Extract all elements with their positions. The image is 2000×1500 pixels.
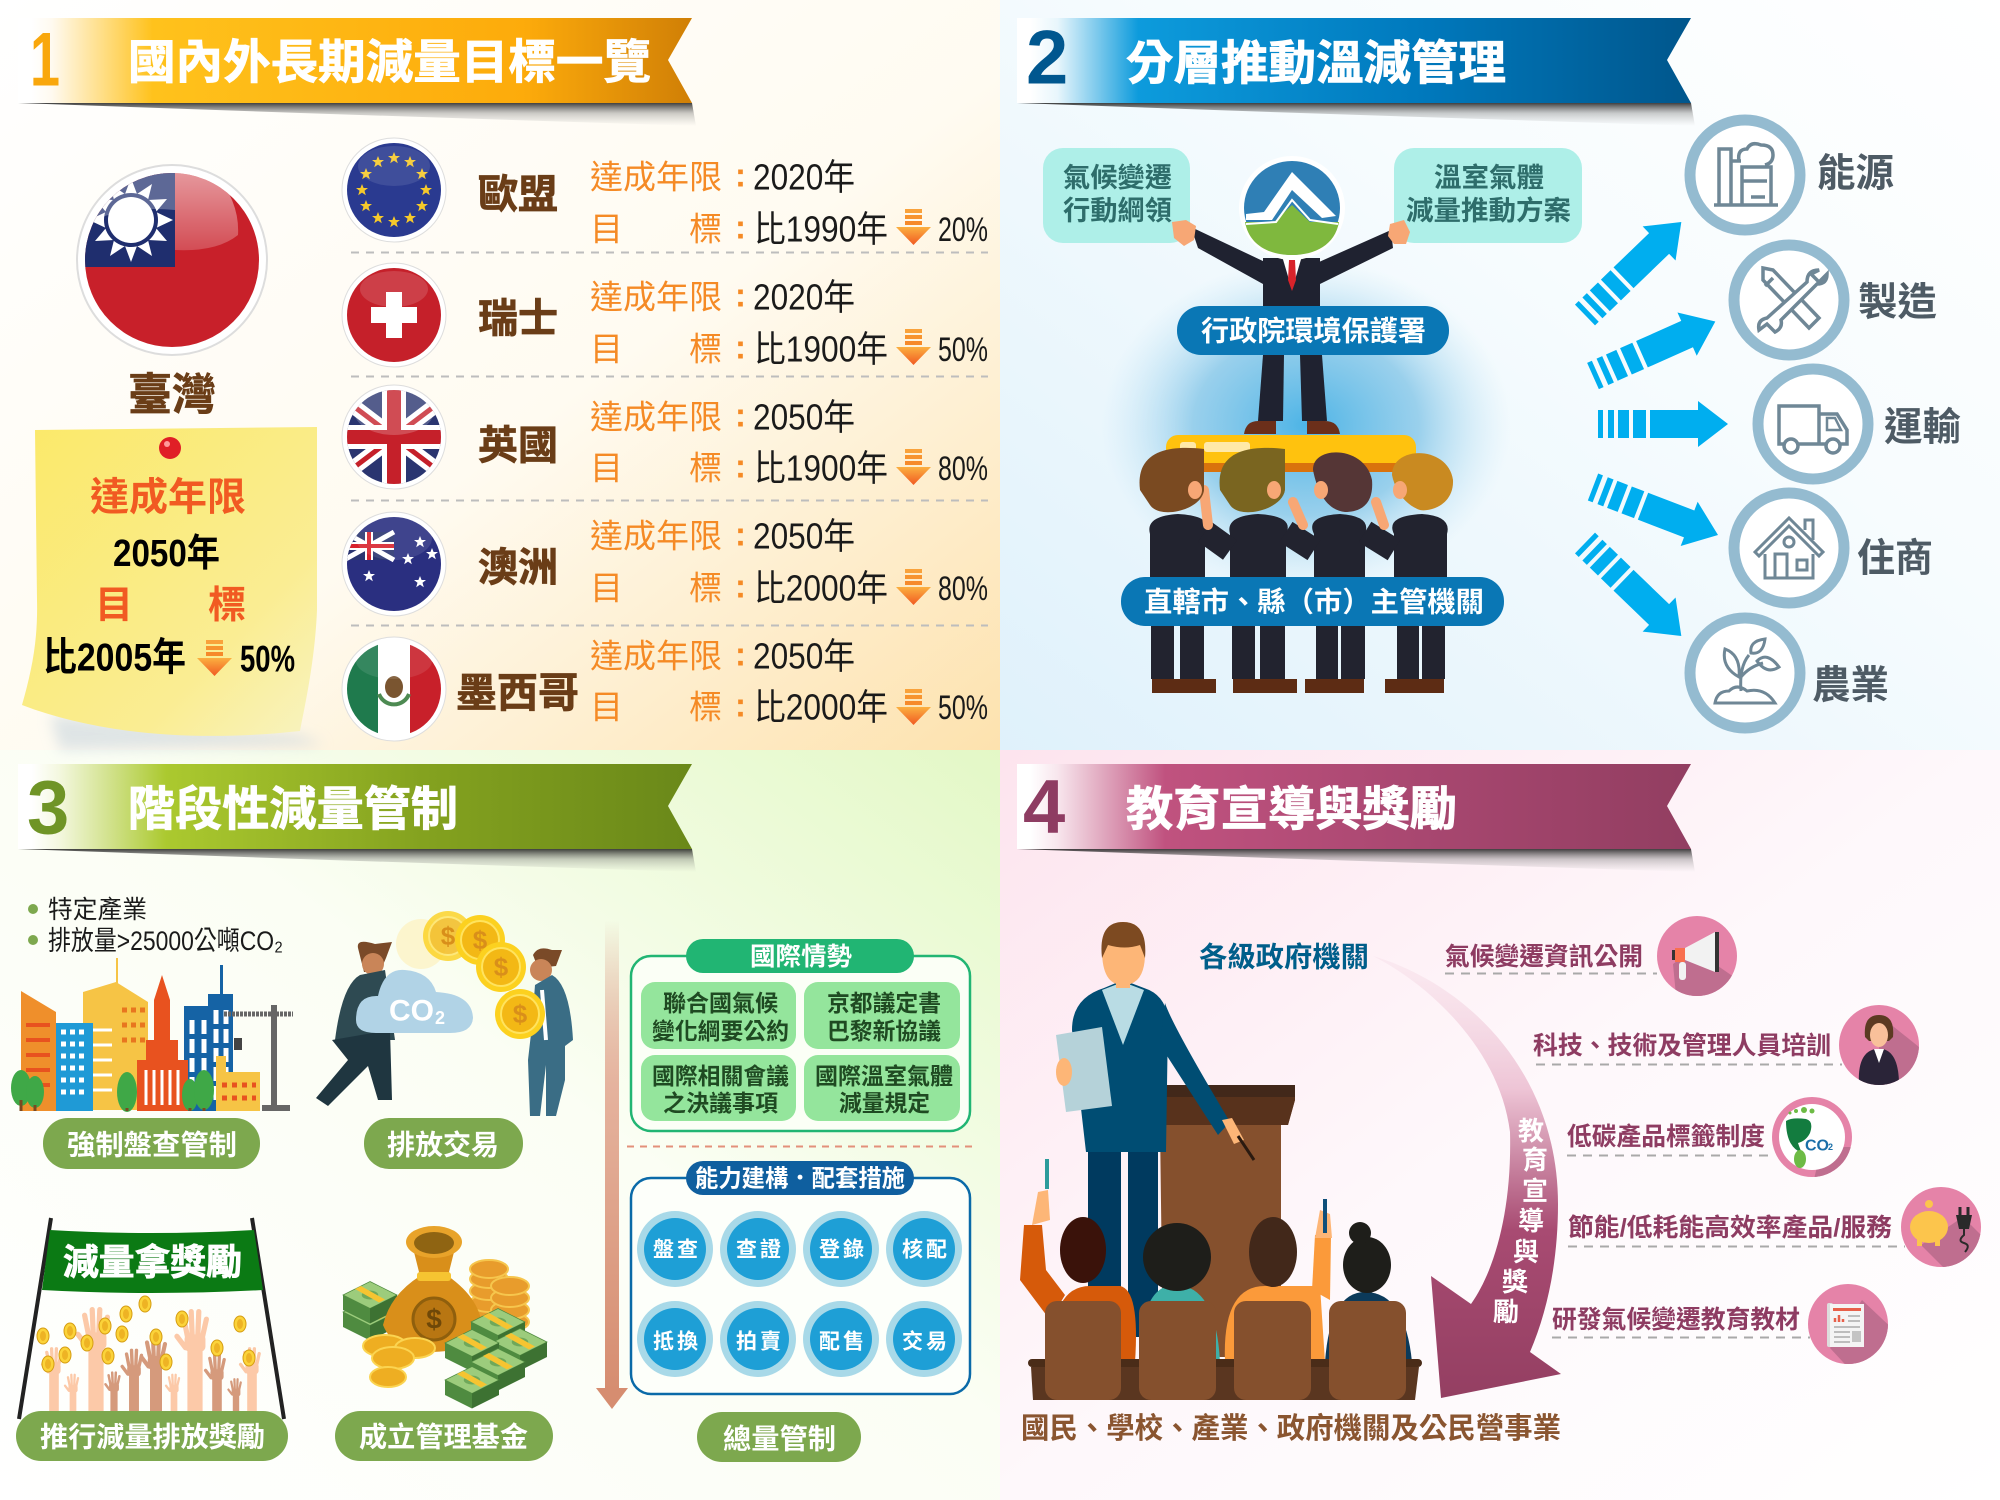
target row: Australia: 標: [689, 570, 722, 606]
callout: greenhouse gas plan: 減量推動方案: [1406, 195, 1571, 226]
figure: standing official: [1172, 156, 1410, 434]
illustration: audience: [1020, 1159, 1422, 1400]
target row: Australia: 比2000年: [754, 568, 888, 608]
target row: UK: 達成年限: [590, 398, 722, 436]
illustration: emissions trading: 2: [435, 1008, 445, 1028]
box: international situation: [631, 939, 970, 1131]
box: capacity building: 核配: [902, 1238, 947, 1262]
arrow: curved flow from government to public: 與: [1513, 1237, 1539, 1267]
target row: Mexico: 目: [590, 688, 623, 726]
heading banner 1: [18, 18, 696, 126]
icon: carbon footprint label: [1772, 1097, 1852, 1177]
icon: newspaper: [1808, 1284, 1888, 1364]
box: international situation: 變化綱要公約: [652, 1018, 789, 1044]
callout: climate action guidelines: 氣候變遷: [1063, 163, 1172, 193]
pill: Environmental Protection Administration: [1177, 306, 1449, 355]
arrow: curved flow from government to public: 導: [1518, 1206, 1544, 1236]
icon: Australia flag: [342, 512, 446, 616]
box: international situation: 國際情勢: [750, 943, 852, 971]
heading banner 1: 國內外長期減量目標一覽: [128, 36, 651, 88]
arrow: to residential and commercial: [1585, 465, 1726, 557]
pill: emissions trading: 排放交易: [387, 1130, 499, 1160]
target row: EU: :: [735, 156, 746, 194]
box: capacity building: 盤查: [653, 1238, 698, 1262]
background: panel 1: [0, 0, 1000, 750]
target row: Mexico: 比2000年: [754, 686, 888, 728]
box: international situation: 國際相關會議: [652, 1063, 789, 1089]
box: capacity building: 拍賣: [736, 1330, 781, 1354]
callout: climate action guidelines: 行動綱領: [1063, 196, 1172, 226]
target row: Australia: [590, 516, 988, 608]
heading banner 3: 階段性減量管制: [128, 782, 458, 836]
icon: Mexico flag: [342, 637, 446, 741]
label: low-carbon product labels: 低碳產品標籤制度: [1567, 1123, 1765, 1151]
pill: emissions trading: [364, 1118, 523, 1169]
icon: carbon footprint label: 2: [1828, 1142, 1833, 1152]
icon: UK flag: [342, 385, 446, 489]
target row: Mexico: 2050年: [753, 636, 855, 676]
arrow: to transport: [1598, 401, 1728, 447]
target row: Mexico: :: [735, 686, 746, 724]
illustration: emissions trading: CO: [389, 994, 434, 1028]
heading banner 3: 3: [27, 766, 69, 850]
illustration: city skyline: [11, 958, 293, 1112]
callout: greenhouse gas plan: 溫室氣體: [1434, 163, 1544, 193]
bullet list: regulated industries: [28, 896, 283, 956]
illustration: reduction reward banner: 減量拿獎勵: [63, 1242, 242, 1282]
target row: EU: 20%: [938, 211, 988, 249]
figure: four supporters: [1140, 448, 1453, 693]
arrow: curved flow from government to public: 宣: [1522, 1176, 1548, 1206]
label: agriculture: 農業: [1812, 664, 1889, 708]
panel: phased reduction control: [11, 764, 978, 1462]
arrow: curved flow from government to public: 教: [1518, 1116, 1544, 1146]
box: capacity building: 配售: [819, 1330, 864, 1354]
target row: UK: 目: [590, 450, 623, 486]
sticky note: Taiwan target: 標: [208, 585, 246, 627]
target row: Australia: 目: [590, 570, 623, 606]
box: capacity building: 交易: [902, 1330, 947, 1354]
illustration: emissions trading: $: [473, 925, 488, 955]
icon: energy: [1690, 120, 1800, 230]
illustration: reduction reward banner: [19, 1218, 284, 1424]
sticky note: Taiwan target: 達成年限: [90, 476, 246, 520]
arrow: vertical flow to cap control: [596, 920, 628, 1409]
arrow: to agriculture: [1569, 526, 1698, 653]
target row: UK: [590, 396, 988, 488]
pill: mandatory inventory: [43, 1118, 260, 1169]
illustration: emissions trading: [316, 911, 573, 1116]
target row: Australia: 達成年限: [590, 518, 722, 554]
sticky note: Taiwan target: [22, 427, 325, 750]
target row: Mexico: 達成年限: [590, 638, 722, 674]
pill: promote reduction rewards: [16, 1411, 288, 1461]
label: residential and commercial: 住商: [1857, 538, 1933, 580]
label: citizens, schools and businesses: 國民、學校、產業、政府機關及公民營事業: [1021, 1412, 1561, 1445]
bullet list: regulated industries: 特定產業: [48, 896, 147, 924]
pill: Environmental Protection Administration: 行政院環境保護署: [1201, 316, 1426, 346]
target row: Switzerland: :: [735, 276, 746, 314]
heading banner 2: 2: [1026, 16, 1068, 100]
illustration: emissions trading: $: [513, 999, 528, 1029]
callout: climate action guidelines: [1043, 148, 1190, 243]
target row: Mexico: 50%: [938, 689, 988, 727]
illustration: emissions trading: $: [441, 921, 456, 951]
target row: Switzerland: :: [735, 328, 746, 366]
label: educational materials: 研發氣候變遷教育教材: [1552, 1305, 1800, 1334]
pill: promote reduction rewards: 推行減量排放獎勵: [40, 1422, 265, 1452]
target row: Switzerland: 達成年限: [590, 278, 722, 316]
background: panel 4: [1000, 750, 2000, 1500]
illustration: emissions trading: $: [494, 952, 509, 982]
pill: county and city agencies: 直轄市、縣（市）主管機關: [1144, 586, 1484, 618]
icon: Taiwan flag: [77, 165, 267, 355]
arrow: curved flow from government to public: 育: [1522, 1145, 1548, 1175]
box: capacity building: [631, 1161, 970, 1394]
label: Australia: 澳洲: [478, 546, 558, 590]
panel: long-term reduction targets: [18, 18, 988, 750]
target row: UK: :: [735, 396, 746, 434]
pill: cap control: [697, 1412, 861, 1462]
pill: mandatory inventory: 強制盤查管制: [67, 1130, 237, 1160]
heading banner 2: 分層推動溫減管理: [1126, 36, 1506, 90]
illustration: money bag and cash: $: [426, 1304, 442, 1334]
heading banner 1: 1: [30, 18, 60, 102]
label: transport: 運輸: [1884, 406, 1961, 450]
pill: cap control: 總量管制: [723, 1424, 836, 1454]
box: capacity building: 登錄: [819, 1238, 864, 1262]
heading banner 4: 4: [1023, 764, 1065, 850]
target row: Switzerland: 目: [590, 330, 623, 368]
icon: EU flag: [342, 138, 446, 242]
label: staff training: 科技、技術及管理人員培訓: [1533, 1032, 1831, 1060]
heading banner 2: [1017, 16, 1695, 126]
pill: establish management fund: [335, 1411, 553, 1461]
illustration: presenter: [1056, 922, 1254, 1337]
icon: carbon footprint label: CO: [1805, 1138, 1829, 1154]
target row: Mexico: :: [735, 636, 746, 672]
icon: megaphone: [1657, 916, 1737, 996]
label: government agencies: 各級政府機關: [1199, 942, 1369, 972]
arrow: to energy: [1569, 205, 1698, 332]
icon: residential and commercial: [1734, 493, 1844, 603]
box: international situation: 國際溫室氣體: [815, 1063, 953, 1089]
figure: yellow platform: [1166, 435, 1416, 472]
target row: Mexico: 標: [689, 688, 722, 726]
target row: Australia: 80%: [938, 570, 988, 608]
sticky note: Taiwan target: 50%: [240, 638, 295, 680]
pill: county and city agencies: [1121, 577, 1504, 626]
target row: UK: 2050年: [753, 396, 855, 438]
label: UK: 英國: [478, 424, 558, 468]
target row: Australia: :: [735, 568, 746, 604]
target row: EU: 標: [689, 210, 722, 248]
target row: EU: :: [735, 208, 746, 246]
illustration: money bag and cash: [343, 1226, 547, 1408]
target row: UK: 80%: [938, 450, 988, 488]
label: energy: 能源: [1817, 152, 1894, 196]
target row: EU: 比1990年: [754, 208, 888, 250]
background: panel 2: [1000, 0, 2000, 750]
target row: Switzerland: 標: [689, 330, 722, 368]
arrow: to manufacturing: [1583, 300, 1725, 398]
box: international situation: 聯合國氣候: [663, 990, 778, 1016]
target row: Switzerland: [590, 276, 988, 370]
arrow: curved flow from government to public: 勵: [1493, 1297, 1519, 1327]
target row: Australia: 2050年: [753, 516, 855, 556]
bullet list: regulated industries: 排放量>25000公噸CO₂: [48, 926, 283, 956]
target row: EU: 目: [590, 210, 623, 248]
sticky note: Taiwan target: 目: [95, 585, 133, 627]
target row: UK: :: [735, 448, 746, 484]
box: international situation: 巴黎新協議: [827, 1018, 941, 1044]
icon: piggy bank and plug: [1901, 1187, 1981, 1267]
box: capacity building: 查證: [736, 1238, 781, 1262]
label: EU: 歐盟: [478, 173, 558, 217]
target row: Australia: :: [735, 516, 746, 552]
icon: transport: [1758, 369, 1868, 479]
pill: establish management fund: 成立管理基金: [359, 1422, 528, 1452]
target row: Mexico: [590, 636, 988, 728]
target row: EU: [590, 156, 988, 250]
sticky note: Taiwan target: 2050年: [113, 533, 220, 575]
label: Mexico: 墨西哥: [456, 670, 579, 716]
target row: EU: 2020年: [753, 156, 855, 198]
target row: EU: 達成年限: [590, 158, 722, 196]
icon: agriculture: [1690, 618, 1800, 728]
target row: UK: 標: [689, 450, 722, 486]
heading banner 3: [18, 764, 696, 872]
sticky note: Taiwan target: 比2005年: [43, 636, 186, 680]
arrow: curved flow from government to public: [1373, 956, 1561, 1398]
background: panel 3: [0, 750, 1000, 1500]
panel: education and rewards: [1017, 764, 1991, 1445]
illustration: podium: [1160, 1085, 1295, 1357]
box: capacity building: 能力建構．配套措施: [695, 1166, 905, 1192]
target row: UK: 比1900年: [754, 448, 888, 488]
background glow: [1101, 260, 1511, 590]
label: Switzerland: 瑞士: [478, 297, 558, 341]
heading banner 4: [1017, 764, 1695, 872]
icon: manufacturing: [1734, 245, 1844, 355]
target row: Switzerland: 比1900年: [754, 328, 888, 370]
label: manufacturing: 製造: [1858, 282, 1937, 324]
panel: tiered management: [1017, 16, 1961, 728]
callout: greenhouse gas plan: [1394, 148, 1582, 243]
arrow: curved flow from government to public: 獎: [1502, 1267, 1528, 1297]
label: energy efficient products: 節能/低耗能高效率產品/服務: [1568, 1214, 1892, 1242]
label: climate information disclosure: 氣候變遷資訊公開: [1445, 943, 1643, 971]
box: international situation: 之決議事項: [663, 1090, 778, 1116]
box: capacity building: 抵換: [653, 1330, 698, 1354]
box: international situation: 京都議定書: [827, 990, 941, 1016]
icon: Swiss flag: [342, 263, 446, 367]
target row: Switzerland: 2020年: [753, 276, 855, 318]
target row: Switzerland: 50%: [938, 331, 988, 369]
box: international situation: 減量規定: [839, 1090, 930, 1116]
label: Taiwan: 臺灣: [128, 370, 216, 420]
heading banner 4: 教育宣導與獎勵: [1126, 782, 1457, 836]
icon: businesswoman: [1839, 1005, 1919, 1085]
